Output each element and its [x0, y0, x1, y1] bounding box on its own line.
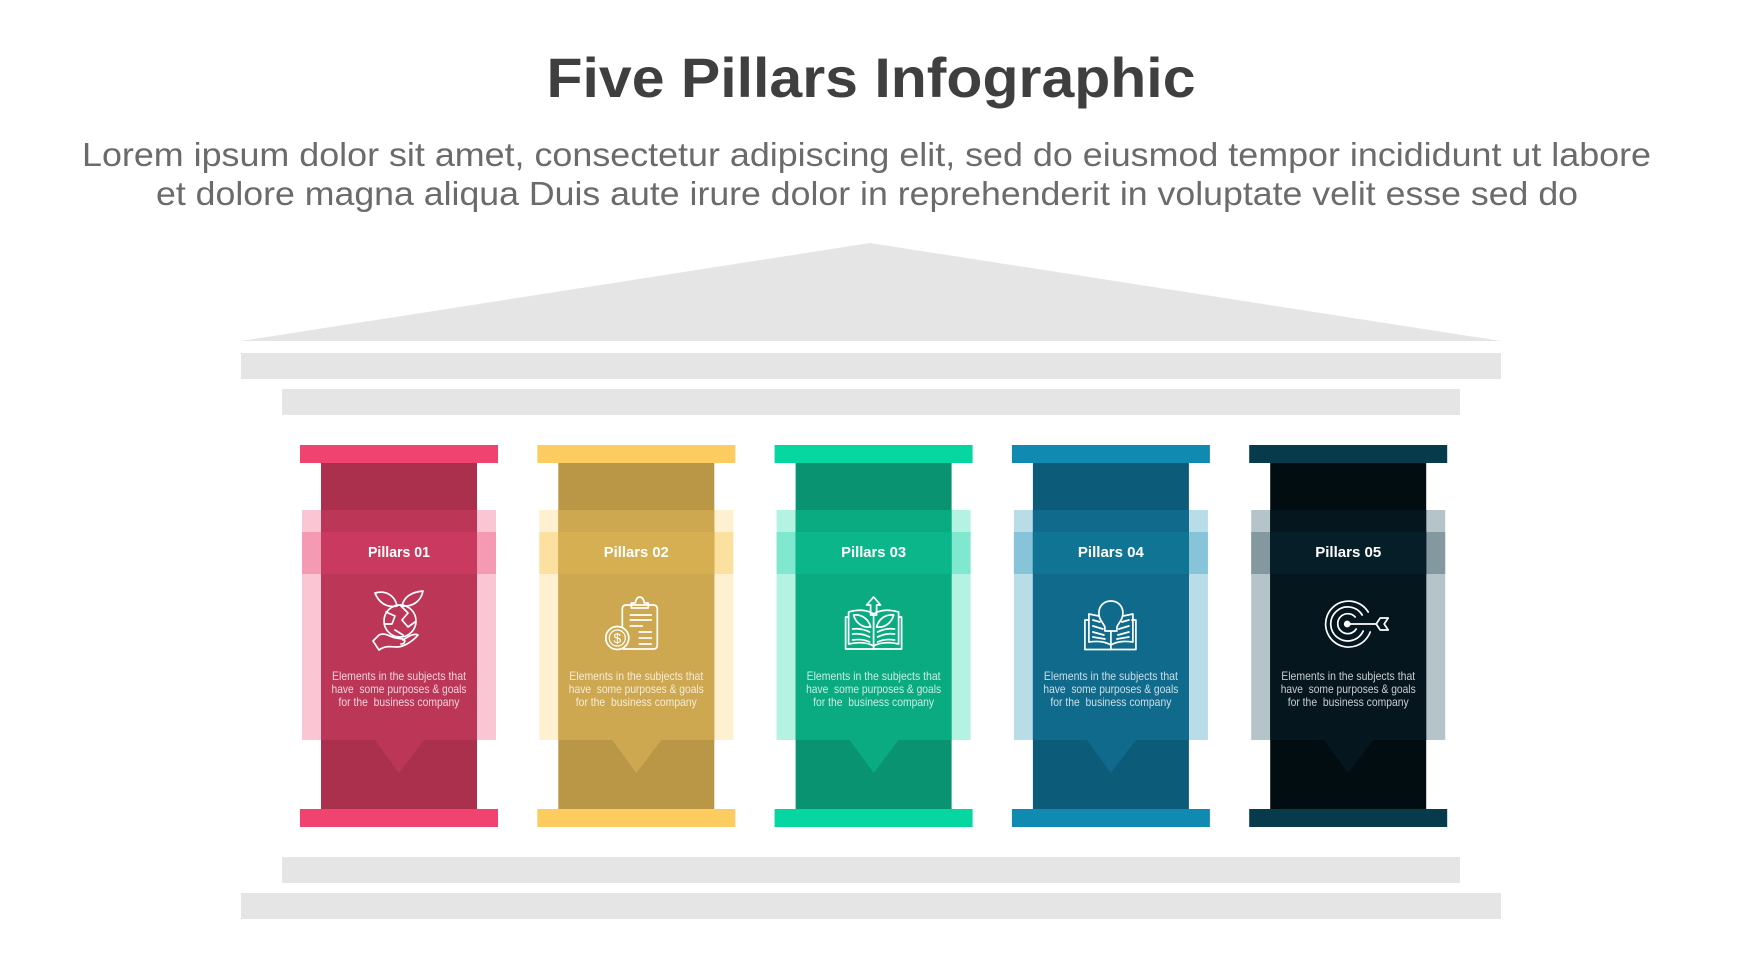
- pillar description: Elements in the subjects that: [332, 670, 467, 683]
- column panel: [321, 510, 477, 740]
- pillar description: have some purposes & goals: [806, 683, 941, 696]
- side panel: [539, 510, 733, 740]
- top cap: [537, 445, 735, 463]
- lower entablature bar: [282, 389, 1460, 415]
- bottom cap: [537, 809, 735, 827]
- side band: [539, 532, 733, 574]
- pillar description: [1281, 670, 1416, 709]
- pillar heading: Pillars 05: [1315, 544, 1381, 561]
- pillar description: Elements in the subjects that: [807, 670, 941, 683]
- subtitle text: et dolore magna aliqua Duis aute irure dolor in reprehenderit in voluptate velit esse sed do: [156, 175, 1578, 212]
- pointer triangle: [1324, 740, 1373, 773]
- pillar heading: Pillars 01: [368, 544, 430, 561]
- column panel: [1033, 510, 1189, 740]
- side panel: [777, 510, 971, 740]
- column panel: [558, 510, 714, 740]
- icon: globe with leaves in hand: [373, 591, 423, 650]
- pillar description: Elements in the subjects that: [1281, 670, 1416, 683]
- pillar description: for the business company: [576, 696, 697, 709]
- column shaft: [796, 463, 952, 809]
- side band: [1014, 532, 1208, 574]
- top cap: [300, 445, 498, 463]
- pointer triangle: [1087, 740, 1136, 773]
- pillar description: have some purposes & goals: [1043, 683, 1179, 696]
- icon: clipboard with dollar coin: [606, 597, 657, 650]
- top cap: [1012, 445, 1210, 463]
- pointer triangle: [850, 740, 899, 773]
- header band: [1270, 532, 1426, 574]
- subtitle text: Lorem ipsum dolor sit amet, consectetur adipiscing elit, sed do eiusmod tempor incididunt ut labore: [82, 136, 1651, 173]
- top cap: [1249, 445, 1447, 463]
- pillar description: have some purposes & goals: [332, 683, 467, 696]
- pillar heading: Pillars 02: [604, 544, 669, 561]
- column shaft: [558, 463, 714, 809]
- icon: open book with leaves and arrow: [846, 597, 902, 649]
- header band: [558, 532, 714, 574]
- icon: open book with light bulb: [1085, 601, 1136, 650]
- pillar description: Elements in the subjects that: [1044, 670, 1179, 683]
- pillar description: for the business company: [1050, 696, 1172, 709]
- pillar description: Elements in the subjects that: [569, 670, 704, 683]
- title: Five Pillars Infographic: [546, 46, 1196, 109]
- pillar description: [1043, 670, 1179, 709]
- pillar 01: [300, 445, 498, 827]
- pillar description: have some purposes & goals: [1281, 683, 1416, 696]
- column shaft: [1270, 463, 1426, 809]
- column panel: [796, 510, 952, 740]
- side panel: [1251, 510, 1445, 740]
- side band: [777, 532, 971, 574]
- bottom cap: [300, 809, 498, 827]
- bottom cap: [775, 809, 973, 827]
- temple roof: [241, 243, 1501, 341]
- upper base bar: [282, 857, 1460, 883]
- side band: [302, 532, 496, 574]
- pillar 04: [1012, 445, 1210, 827]
- pillar description: [569, 670, 704, 709]
- pillar description: have some purposes & goals: [569, 683, 704, 696]
- column panel: [1270, 510, 1426, 740]
- pillar 05: [1249, 445, 1447, 827]
- pillar description: for the business company: [813, 696, 934, 709]
- pillar description: [332, 670, 467, 709]
- upper entablature bar: [241, 353, 1501, 379]
- bottom cap: [1249, 809, 1447, 827]
- pillar heading: Pillars 04: [1078, 544, 1145, 561]
- side panel: [302, 510, 496, 740]
- header band: [321, 532, 477, 574]
- subtitle text: [82, 136, 1651, 212]
- icon: target with arrow: [1326, 601, 1388, 647]
- pillar description: for the business company: [1288, 696, 1409, 709]
- pointer triangle: [612, 740, 661, 773]
- top cap: [775, 445, 973, 463]
- lower base bar: [241, 893, 1501, 919]
- column shaft: [1033, 463, 1189, 809]
- header band: [1033, 532, 1189, 574]
- side band: [1251, 532, 1445, 574]
- pillar heading: Pillars 03: [841, 544, 906, 561]
- column shaft: [321, 463, 477, 809]
- header band: [796, 532, 952, 574]
- pointer triangle: [375, 740, 424, 773]
- pillar description: for the business company: [338, 696, 460, 709]
- bottom cap: [1012, 809, 1210, 827]
- icon: dollar sign: $: [613, 630, 621, 646]
- pillar 03: [775, 445, 973, 827]
- pillar 02: [537, 445, 735, 827]
- pillar description: [806, 670, 941, 709]
- side panel: [1014, 510, 1208, 740]
